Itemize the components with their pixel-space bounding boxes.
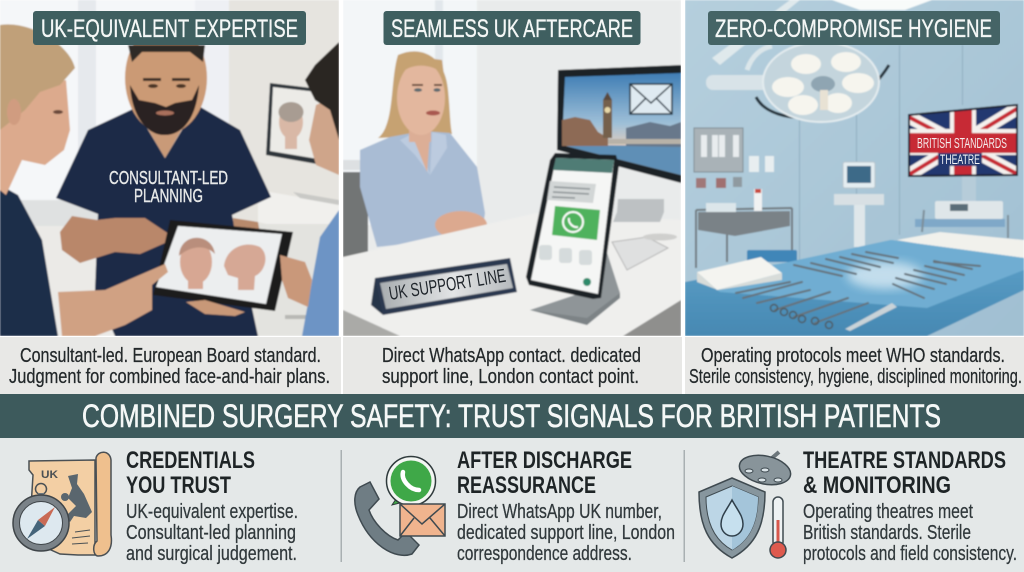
heading tag xyxy=(384,11,640,45)
scrubs text: CONSULTANT-LED xyxy=(109,168,228,188)
icon: theatre lamp, shield and thermometer xyxy=(699,451,793,558)
caption strip xyxy=(0,337,1024,394)
wall monitor xyxy=(557,65,681,183)
caption: hygiene xyxy=(689,345,1022,388)
caption: expertise: Consultant-led. European Board standard. xyxy=(20,345,321,367)
desk xyxy=(344,224,488,258)
wall panel xyxy=(694,128,743,172)
heading: CREDENTIALS xyxy=(126,447,255,474)
equipment bench xyxy=(915,219,1005,227)
heading tag: SEAMLESS UK AFTERCARE xyxy=(391,15,633,43)
column: theatre standards and monitoring xyxy=(699,447,1017,565)
heading: & MONITORING xyxy=(803,472,951,499)
body text: British standards. Sterile xyxy=(803,522,971,544)
flag text: THEATRE xyxy=(940,151,980,167)
heading: AFTER DISCHARGE xyxy=(457,447,632,474)
heading xyxy=(126,447,255,499)
column: after discharge reassurance xyxy=(355,447,675,565)
heading tag xyxy=(33,11,306,45)
heading tag: UK-EQUIVALENT EXPERTISE xyxy=(41,15,298,43)
tablet xyxy=(153,220,293,311)
body text: dedicated support line, London xyxy=(457,522,675,544)
holding hand xyxy=(186,300,245,316)
body text: UK-equivalent expertise. xyxy=(126,501,298,523)
caption: aftercare: Direct WhatsApp contact. dedicated xyxy=(382,345,641,367)
heading: YOU TRUST xyxy=(126,472,231,499)
body text: correspondence address. xyxy=(457,543,632,565)
wall display: union flag xyxy=(908,105,1018,176)
towels xyxy=(697,257,782,290)
background monitor xyxy=(265,82,316,164)
column: credentials you trust xyxy=(13,447,298,565)
body text: and surgical judgement. xyxy=(126,543,297,565)
woman: face xyxy=(397,61,445,135)
icon: UK map and compass: UK xyxy=(41,469,58,481)
sign text: UK SUPPORT LINE xyxy=(387,266,507,305)
monitor envelope xyxy=(630,84,672,114)
photo scene: operating theatre xyxy=(685,0,1024,336)
woman: hair xyxy=(378,51,452,138)
woman right xyxy=(302,210,339,336)
photo scene: clinicians reviewing tablet xyxy=(0,0,339,336)
icon: phone, WhatsApp and envelope xyxy=(355,456,445,555)
body text: Consultant-led planning xyxy=(126,522,296,544)
body text xyxy=(457,501,675,565)
panel: seamless UK aftercare xyxy=(343,0,681,336)
surgical lamp xyxy=(706,74,764,90)
keyboard and mouse xyxy=(612,237,668,270)
phone xyxy=(526,153,619,299)
patient monitor xyxy=(843,162,875,188)
icon: UK map and compass xyxy=(13,452,111,556)
panel: zero-compromise hygiene xyxy=(685,0,1024,336)
sign plate xyxy=(371,278,383,315)
woman: blouse xyxy=(360,131,485,247)
trolley xyxy=(696,208,792,268)
caption: expertise xyxy=(9,345,330,388)
phone stand xyxy=(530,252,620,319)
body text xyxy=(803,501,1017,565)
instruments xyxy=(736,252,980,323)
scrubs text xyxy=(110,170,228,202)
man: pointing arm xyxy=(60,216,175,263)
flag text xyxy=(918,138,1007,164)
bottom section background xyxy=(0,438,1024,572)
caption: expertise: Judgment for combined face-and-hair plans. xyxy=(9,366,330,388)
caption: aftercare xyxy=(382,345,641,388)
body text: Direct WhatsApp UK number, xyxy=(457,501,662,523)
panel: UK-equivalent expertise xyxy=(0,0,339,336)
heading: REASSURANCE xyxy=(457,472,596,499)
woman left: arm and pointing hand xyxy=(58,264,168,336)
heading xyxy=(457,447,632,499)
body text xyxy=(126,501,298,565)
woman left: scrubs and hair xyxy=(0,185,58,336)
man: scrubs xyxy=(56,105,271,336)
man: head xyxy=(124,45,208,130)
body text: Operating theatres meet xyxy=(803,501,973,523)
scrubs text: PLANNING xyxy=(134,186,203,206)
caption: aftercare: support line, London contact point. xyxy=(382,366,639,388)
heading xyxy=(803,447,1006,499)
bed xyxy=(897,232,1024,262)
photo scene: aftercare desk xyxy=(343,0,681,336)
